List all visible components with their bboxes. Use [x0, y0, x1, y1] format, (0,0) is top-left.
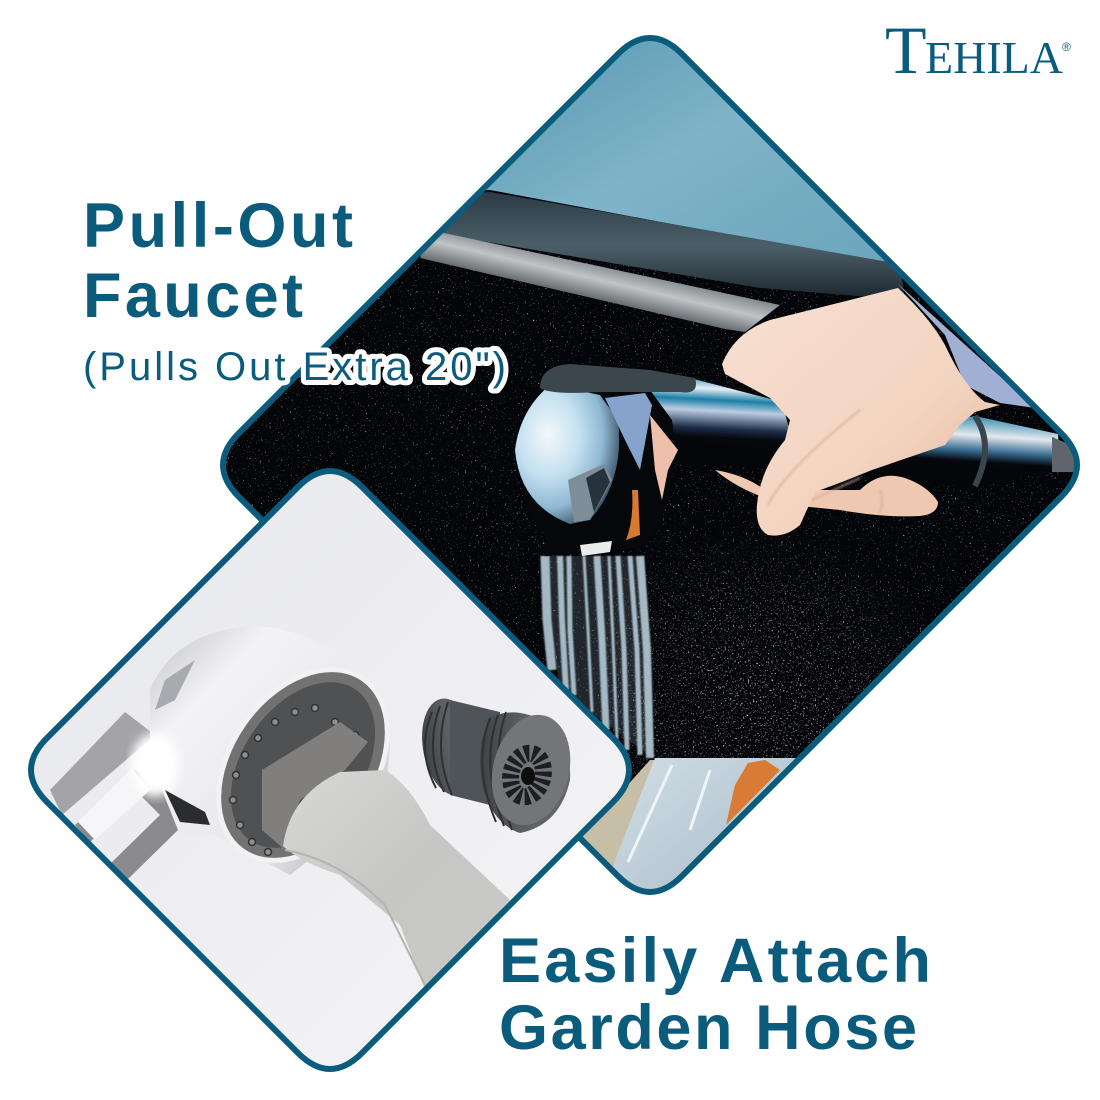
hand [722, 288, 1000, 536]
plate ridge [628, 765, 710, 862]
reflected hand [650, 415, 678, 500]
orange tag [726, 760, 780, 825]
aerator threads [425, 702, 512, 830]
dark sink background [226, 190, 1074, 783]
aerator face [481, 706, 581, 834]
chrome ball dark panel [586, 468, 610, 512]
logo: Tehila: EHILA [925, 32, 1063, 83]
braided hose [420, 230, 780, 332]
spray head [515, 388, 674, 556]
outlet ring inner [201, 655, 405, 875]
heading: Easily Attach Garden Hose [499, 926, 931, 1063]
chrome dome [150, 626, 390, 875]
tube crease [285, 850, 425, 985]
hex nut [262, 722, 368, 850]
chrome handle left [652, 379, 788, 468]
aerator rear body [415, 694, 485, 800]
dome dark shadow [165, 790, 210, 825]
ring holes [230, 704, 358, 856]
hose tube [283, 770, 510, 990]
heading: Easily Attach Garden Hose: Easily Attach [499, 926, 931, 996]
heading: Pull-Out Faucet: Faucet [83, 261, 303, 331]
chrome ball grey panel [568, 464, 612, 522]
chrome reflection [605, 393, 652, 470]
aerator centre [521, 767, 535, 785]
lever frame [75, 770, 178, 882]
dark rubber gasket [440, 192, 905, 300]
diamond outline [31, 471, 629, 1069]
handle collar [975, 416, 985, 486]
heading: Pull-Out Faucet [83, 191, 353, 331]
water haze [540, 556, 653, 758]
panel: pull-out faucet photo diamond [200, 20, 1100, 920]
aerator grille [506, 750, 548, 800]
subheading: pulls out extra 20 inches: (Pulls Out Extra 20") [83, 345, 506, 389]
sink metal plate [612, 758, 796, 889]
panel: garden hose attachment diamond [28, 468, 632, 1072]
aerator front body [480, 712, 570, 833]
rubber button [540, 364, 696, 393]
water streams [545, 556, 650, 758]
splash droplets [600, 534, 926, 780]
aerator neck [450, 700, 510, 810]
finger shadows [768, 410, 882, 514]
logo: Tehila: T [885, 12, 927, 88]
hand: lower fingers [715, 470, 938, 516]
blue wall [486, 41, 886, 262]
chrome handle right [864, 416, 1058, 486]
sweater cuff [898, 284, 1035, 408]
speckled water droplets [200, 240, 1100, 780]
reflected hose [626, 490, 640, 540]
heading: Pull-Out Faucet: Pull-Out [83, 191, 353, 261]
lever inner highlight [78, 768, 150, 840]
sink edge wood [582, 760, 654, 866]
aerator [415, 694, 581, 834]
chrome arm [50, 712, 155, 815]
logo: Tehila: ® [1062, 40, 1071, 54]
chrome ball highlight [515, 385, 619, 524]
heading: Easily Attach Garden Hose: Garden Hose [499, 993, 917, 1063]
outlet ring [221, 672, 389, 863]
spray nozzle rim [580, 541, 612, 556]
dome bright highlight [131, 733, 179, 797]
hose end [1052, 437, 1076, 472]
logo: Tehila [885, 12, 1071, 88]
light background [34, 474, 626, 1066]
dome facet [155, 660, 195, 710]
diamond outline [223, 38, 1077, 892]
